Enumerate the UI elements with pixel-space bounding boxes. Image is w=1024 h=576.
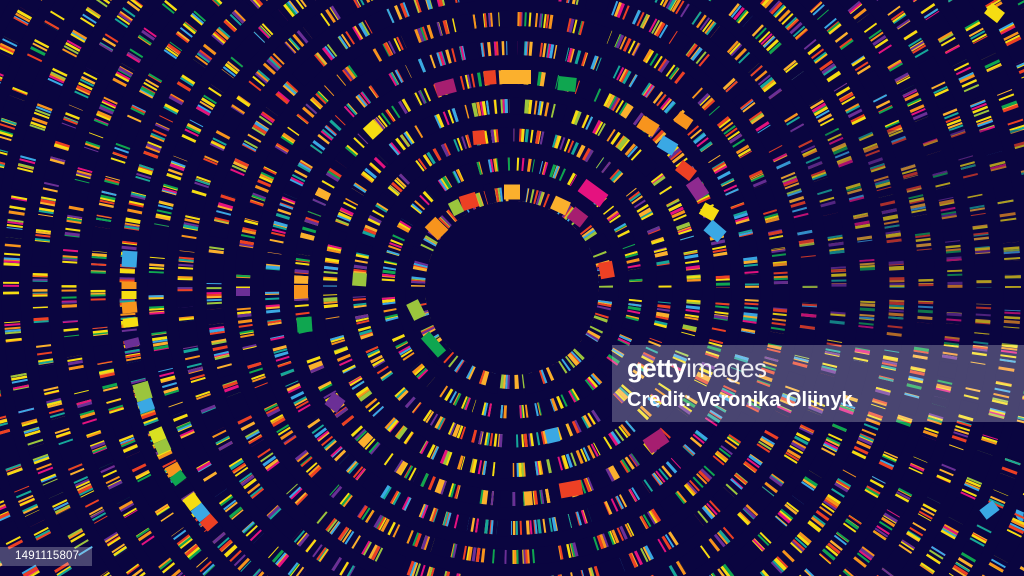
image id tag: 1491115807 [15,550,79,562]
ring 7 [243,19,781,557]
ring 11 [127,0,897,576]
ring 9 [185,0,839,576]
ring 5 [301,77,723,499]
ring 10 [156,0,868,576]
image id tag [0,547,92,566]
ring 1 [415,191,609,385]
ring 6 [272,48,752,528]
watermark band [612,345,1024,422]
ring 2 [388,164,636,412]
ring 4 [330,106,694,470]
photo credit: Credit: Veronika Oliinyk [627,389,853,411]
ring 8 [214,0,810,576]
watermark logo: gettyimages [627,353,766,383]
ring 3 [359,135,665,441]
feature blocks: large colour bars [129,8,1001,527]
